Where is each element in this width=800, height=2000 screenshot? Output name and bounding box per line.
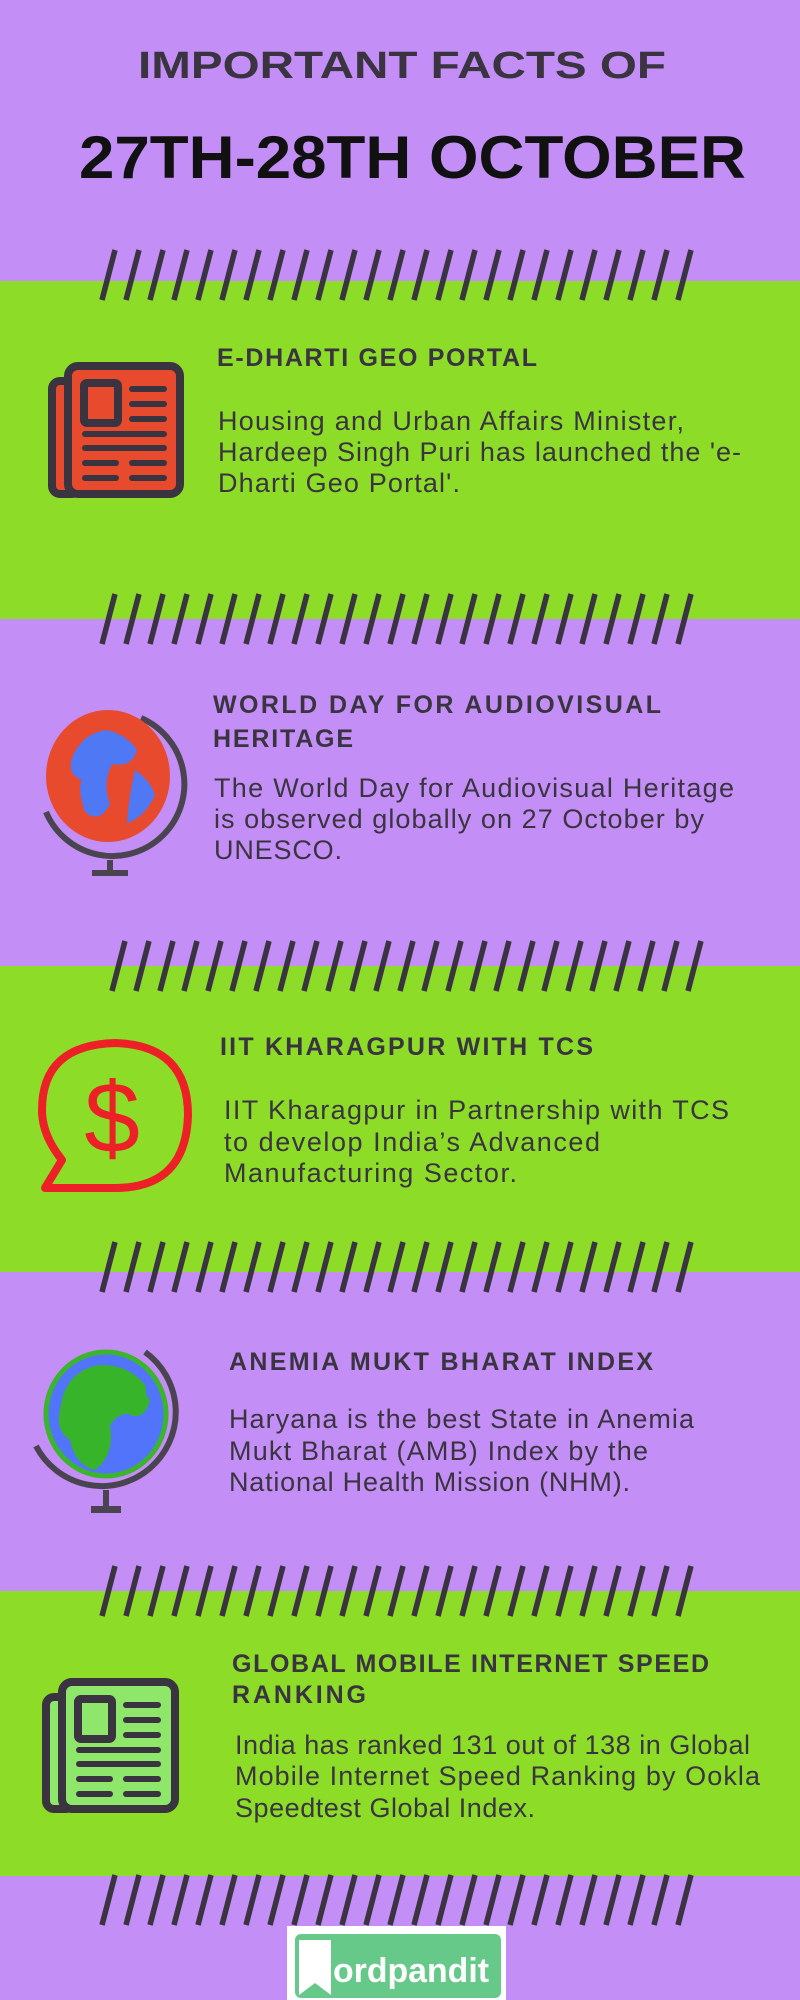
title (79, 45, 746, 191)
heading: section 3: IIT KHARAGPUR WITH TCS (220, 1033, 593, 1061)
text block: section 2: is observed globally on 27 October by (214, 804, 704, 834)
icon: dollar speech bubble: $ (84, 1062, 140, 1174)
text block: section 4: National Health Mission (NHM). (229, 1467, 630, 1497)
text block: section 4 (229, 1404, 695, 1497)
text block: section 1: Hardeep Singh Puri has launched the 'e- (218, 437, 741, 467)
title: 27TH-28TH OCTOBER (79, 124, 746, 191)
logo: wordpandit (287, 1926, 506, 2000)
icon: dollar speech bubble (42, 1043, 188, 1188)
icon: globe green (36, 1352, 176, 1513)
heading: section 5 (232, 1650, 709, 1709)
text block: section 5: Speedtest Global Index. (235, 1793, 535, 1823)
text block: section 3 (224, 1095, 729, 1188)
text block: section 2: UNESCO. (214, 835, 342, 865)
panel: green section 5 (0, 1591, 800, 1876)
heading: section 2: WORLD DAY FOR AUDIOVISUAL (213, 691, 661, 719)
title: IMPORTANT FACTS OF (138, 45, 666, 87)
text block: section 1: Housing and Urban Affairs Minister, (218, 406, 684, 436)
text block: section 4: Mukt Bharat (AMB) Index by the (229, 1436, 648, 1466)
icon: newspaper green (46, 1682, 175, 1809)
text block: section 5: Mobile Internet Speed Ranking by Ookla (235, 1761, 761, 1791)
text block: section 3: IIT Kharagpur in Partnership with TCS (224, 1095, 729, 1125)
icon: globe red (46, 712, 184, 876)
text block: section 1 (218, 406, 741, 498)
text block: section 4: Haryana is the best State in Anemia (229, 1404, 695, 1434)
text block: section 2 (214, 773, 734, 865)
text block: section 5: India has ranked 131 out of 138 in Global (235, 1730, 750, 1760)
logo: wordpandit: ordpandit (333, 1952, 489, 1990)
text block: section 5 (235, 1730, 761, 1823)
heading: section 5: RANKING (232, 1681, 366, 1709)
text block: section 2: The World Day for Audiovisual Heritage (214, 773, 734, 803)
icon: newspaper red (52, 366, 180, 494)
text block: section 1: Dharti Geo Portal'. (218, 468, 460, 498)
panel: green section 3 (0, 966, 800, 1272)
heading: section 1: E-DHARTI GEO PORTAL (217, 344, 537, 372)
text block: section 3: Manufacturing Sector. (224, 1158, 517, 1188)
text block: section 3: to develop India’s Advanced (224, 1127, 600, 1157)
heading: section 5: GLOBAL MOBILE INTERNET SPEED (232, 1650, 709, 1678)
heading: section 4: ANEMIA MUKT BHARAT INDEX (229, 1348, 653, 1376)
heading: section 2 (213, 691, 661, 753)
heading: section 2: HERITAGE (213, 725, 353, 753)
panel: green section 1 (0, 281, 800, 619)
